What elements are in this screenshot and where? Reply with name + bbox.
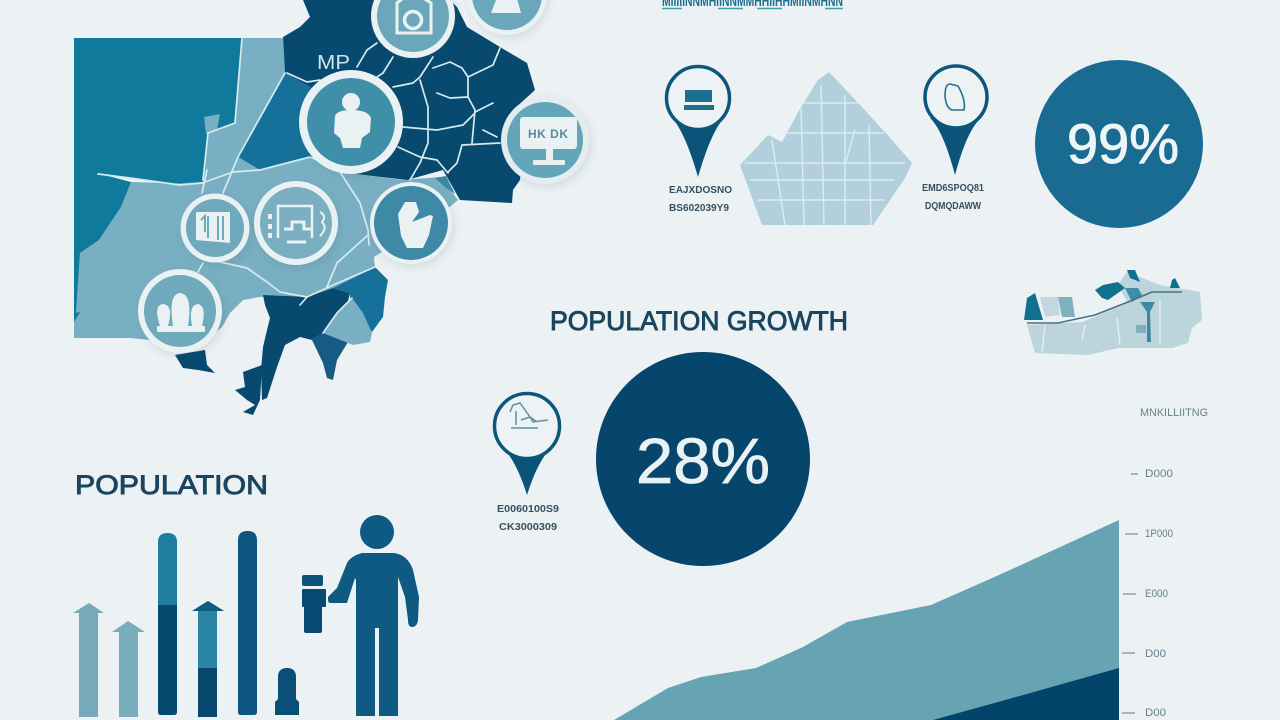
stat: 28%: 28% [636,425,770,497]
map region: southern peninsula [261,288,350,400]
map region: small inlet [204,114,220,134]
stat: 28% [596,352,810,566]
pin: left location marker [666,66,730,177]
map region: southern island [235,365,262,415]
bar chart: population arrows and bars [73,531,299,717]
heading: population growth: POPULATION GROWTH [550,306,848,336]
bar 5 [238,531,257,715]
arrow bar 2 [112,621,145,717]
map region: small teal patch [435,176,455,194]
pin label: left: BS602039Y9 [669,203,729,214]
icon: standing person holding object [302,515,419,716]
chart axis labels: D000 [1145,468,1173,480]
arrow bar 4 [192,601,224,717]
chart axis labels: 1P000 [1145,528,1173,540]
icon: book badge [180,194,250,262]
chart axis labels: D00 [1145,648,1166,660]
map region: navy north-east [283,0,535,203]
map region: southern islet [175,350,215,373]
pin: centre location marker [494,394,560,495]
bar 3 [158,533,177,715]
icon: top right badge [467,0,547,35]
stat: 99% [1035,60,1203,228]
map borders [98,38,500,333]
map region: deep teal west [74,38,242,322]
icon: head [945,84,964,110]
pin label: centre: E0060100S9 [497,504,559,515]
map region: southern right leg [312,333,348,380]
chart axis labels: E000 [1145,588,1168,600]
pin: right location marker [925,66,987,175]
heading: population: POPULATION [75,470,268,500]
icon: people badge [138,269,222,353]
area chart: population growth [614,520,1119,720]
panel: regional map [74,0,535,415]
icon: person badge [299,70,403,174]
map scribble text: MP [317,52,350,74]
pin label: centre [497,504,559,533]
icon: monitor badge [501,96,589,184]
icon: camera badge [371,0,455,58]
pin label: right [922,183,984,212]
small bar 6 [275,668,299,715]
icon: fist badge [370,182,452,264]
pin label: right: DQMQDAWW [925,201,981,212]
map region: south-east light [323,298,372,345]
arrow bar 1 [73,603,104,717]
map region: south-east teal [333,267,388,332]
icon: bed [684,90,714,110]
stat: 99%: 99% [1067,112,1179,175]
chart axis labels: MNKILLIITNG [1140,407,1208,419]
pin label: left [669,185,732,214]
map region: medium teal [238,73,351,170]
map region: light teal base [74,38,458,345]
mini map: tiled region [740,72,912,225]
pin label: centre: CK3000309 [499,522,557,533]
mini map: regional route [1024,270,1202,355]
icon: device badge [254,181,338,265]
chart axis labels [1122,407,1208,719]
chart axis labels: D00 [1145,707,1166,719]
pin label: left: EAJXDOSNO [669,185,732,196]
pin label: right: EMD6SPOQ81 [922,183,984,194]
icon: house and tool [510,403,548,428]
icon: monitor badge: HK DK [528,127,568,141]
